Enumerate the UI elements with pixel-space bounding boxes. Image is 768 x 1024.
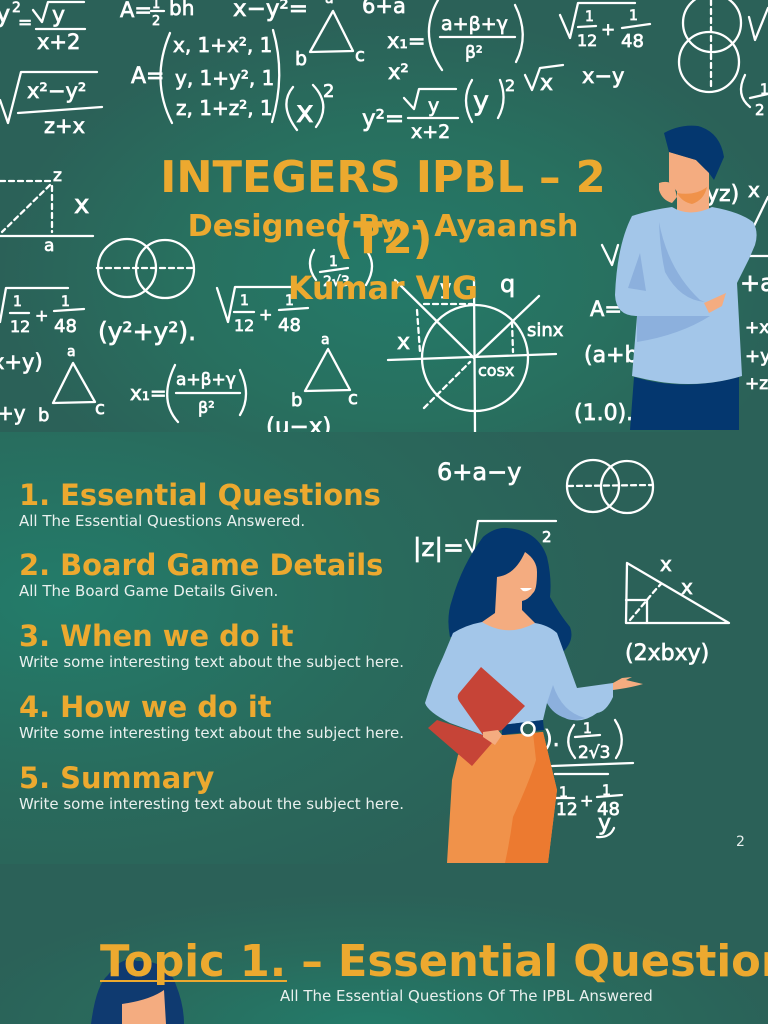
heading underline	[100, 980, 287, 982]
chalk formulas on title slide: x, 1+x², 1	[173, 33, 272, 57]
agenda item 2	[19, 548, 383, 600]
agenda item 5: 5. Summary	[19, 761, 214, 795]
figure: woman head partial	[91, 960, 184, 1024]
chalk formulas on agenda slide: 48	[597, 799, 620, 820]
panel: title slide	[0, 0, 768, 440]
agenda item 3: 3. When we do it	[19, 619, 294, 653]
chalk formulas on title slide: 12	[10, 317, 30, 336]
chalk formulas on title slide: yz)	[706, 182, 739, 207]
chalk formulas on title slide: x²	[388, 60, 409, 84]
title: (T2)	[334, 214, 432, 264]
chalk formulas on title slide: q	[500, 270, 515, 298]
designer credit: Designed By - Ayaansh	[188, 209, 578, 244]
chalk formulas on title slide	[0, 0, 768, 440]
title: INTEGERS IPBL – 2	[160, 153, 606, 203]
chalk formulas on title slide: 2	[505, 76, 515, 95]
chalk formulas on title slide: b	[291, 390, 302, 411]
chalk formulas on title slide: 2√3	[323, 274, 350, 290]
chalk formulas on agenda slide: +	[580, 791, 593, 810]
chalk formulas on title slide: x	[540, 71, 553, 96]
chalk formulas on title slide: c	[348, 388, 358, 409]
chalk formulas on title slide: x	[748, 178, 760, 202]
chalk formulas on agenda slide: (2xbxy)	[625, 641, 709, 666]
chalk formulas on title slide: x	[74, 190, 89, 220]
chalk formulas on agenda slide	[413, 458, 729, 837]
chalk formulas on title slide: +	[601, 20, 615, 40]
chalk formulas on title slide: 48	[278, 315, 301, 336]
chalk formulas on agenda slide: x	[681, 575, 693, 599]
chalk formulas on title slide: y, 1+y², 1	[175, 66, 274, 90]
chalk formulas on agenda slide: 2	[542, 528, 552, 546]
figure: teacher woman	[425, 528, 643, 863]
chalk formulas on title slide: (y²+y²).	[98, 317, 196, 346]
chalk formulas on title slide: 2	[12, 0, 21, 16]
agenda item 4	[19, 690, 404, 742]
chalk formulas on title slide: x−y	[582, 64, 624, 88]
chalk formulas on title slide: 1	[285, 293, 294, 309]
chalk formulas on agenda slide: 2√3	[578, 743, 610, 763]
chalk formulas on title slide: 48	[54, 316, 77, 337]
chalk formulas on title slide: 1	[585, 9, 594, 25]
chalk formulas on title slide: a	[321, 332, 330, 348]
chalk formulas on title slide: x+2	[37, 30, 80, 54]
chalk formulas on title slide: c	[95, 398, 105, 419]
chalk formulas on title slide: β²	[465, 43, 483, 63]
chalk formulas on title slide: y	[52, 3, 65, 28]
chalk formulas on title slide: 1	[240, 293, 249, 309]
agenda item 2: 2. Board Game Details	[19, 548, 383, 582]
chalk formulas on title slide: x+2	[411, 121, 450, 143]
agenda item 1: All The Essential Questions Answered.	[19, 512, 305, 530]
agenda item 1	[19, 478, 381, 530]
chalk formulas on title slide: y²=	[362, 106, 404, 132]
agenda item 4: 4. How we do it	[19, 690, 272, 724]
chalk formulas on title slide: x	[397, 330, 410, 355]
chalk formulas on title slide: +z	[745, 374, 768, 394]
chalk formulas on title slide: 1	[329, 254, 338, 270]
chalk formulas on title slide: 2	[755, 101, 765, 119]
chalk formulas on title slide: 1	[13, 294, 22, 310]
chalk formulas on title slide: z	[53, 166, 62, 186]
chalk formulas on title slide: x²−y²	[27, 79, 86, 103]
figure: thinking man	[615, 126, 757, 430]
chalk formulas on agenda slide: ).	[544, 727, 560, 752]
agenda item 2: All The Board Game Details Given.	[19, 582, 278, 600]
agenda list	[19, 478, 404, 813]
chalk formulas on title slide: y	[440, 277, 451, 299]
chalk formulas on agenda slide: 1	[602, 783, 611, 799]
chalk formulas on agenda slide: 6+a−y	[437, 458, 521, 486]
chalk formulas on title slide: +	[35, 306, 48, 325]
panel: topic slide	[0, 864, 768, 1024]
chalk formulas on title slide: A=	[590, 297, 622, 321]
chalk formulas on title slide: a+β+γ	[441, 13, 508, 35]
agenda item 5	[19, 761, 404, 813]
chalk formulas on title slide: (a+b)	[584, 343, 647, 368]
chalk formulas on title slide: y	[473, 86, 489, 117]
chalk formulas on title slide: y	[428, 95, 439, 117]
chalk formulas on title slide: x	[296, 95, 314, 130]
title	[160, 153, 606, 264]
chalk formulas on agenda slide: |z|=	[413, 533, 464, 562]
designer credit: Kumar VIG	[288, 271, 478, 307]
agenda item 1: 1. Essential Questions	[19, 478, 381, 512]
agenda item 4: Write some interesting text about the subject here.	[19, 724, 404, 742]
chalk formulas on title slide: x₁=	[130, 381, 167, 405]
chalk formulas on title slide: b	[38, 405, 49, 426]
chalk formulas on title slide: 1	[61, 294, 70, 310]
chalk formulas on title slide: 12	[577, 31, 597, 50]
chalk formulas on agenda slide: x	[660, 552, 672, 576]
chalk formulas on title slide: 2	[323, 81, 334, 102]
chalk formulas on title slide: a	[67, 344, 76, 360]
chalk formulas on title slide: cosx	[478, 361, 514, 380]
chalk formulas on title slide: β²	[198, 398, 215, 417]
chalk formulas on title slide: +	[259, 305, 272, 324]
chalk formulas on title slide: (u−x)	[266, 414, 331, 440]
chalk formulas on title slide: A=	[131, 64, 164, 89]
chalk formulas on agenda slide: 1	[583, 721, 592, 737]
agenda item 5: Write some interesting text about the subject here.	[19, 795, 404, 813]
chalk formulas on title slide: 2	[152, 14, 160, 29]
chalk formulas on title slide: a	[44, 236, 54, 256]
chalk formulas on title slide: z, 1+z², 1	[176, 96, 273, 120]
chalk formulas on title slide: 1	[629, 8, 638, 24]
designer credit	[188, 209, 578, 307]
chalk formulas on title slide: sinx	[527, 320, 564, 341]
chalk formulas on title slide: c	[355, 45, 365, 66]
chalk formulas on title slide: =	[18, 13, 32, 33]
chalk formulas on title slide: b	[295, 48, 307, 70]
chalk formulas on agenda slide: y	[598, 811, 611, 836]
chalk formulas on title slide: z+x	[44, 114, 85, 138]
chalk formulas on title slide: x₁=	[387, 29, 425, 53]
chalk formulas on title slide: 12	[234, 316, 254, 335]
chalk formulas on title slide: (1.0).	[574, 401, 633, 426]
panel: agenda slide	[0, 432, 768, 864]
page number: 2	[736, 834, 745, 850]
agenda item 3: Write some interesting text about the subject here.	[19, 653, 404, 671]
topic subtitle: All The Essential Questions Of The IPBL Answered	[280, 987, 653, 1005]
agenda item 3	[19, 619, 404, 671]
chalk formulas on title slide: 48	[621, 31, 644, 52]
chalk formulas on agenda slide: 12	[556, 800, 578, 820]
chalk formulas on agenda slide: 1	[559, 785, 568, 801]
chalk formulas on title slide: a+β+γ	[176, 370, 236, 390]
